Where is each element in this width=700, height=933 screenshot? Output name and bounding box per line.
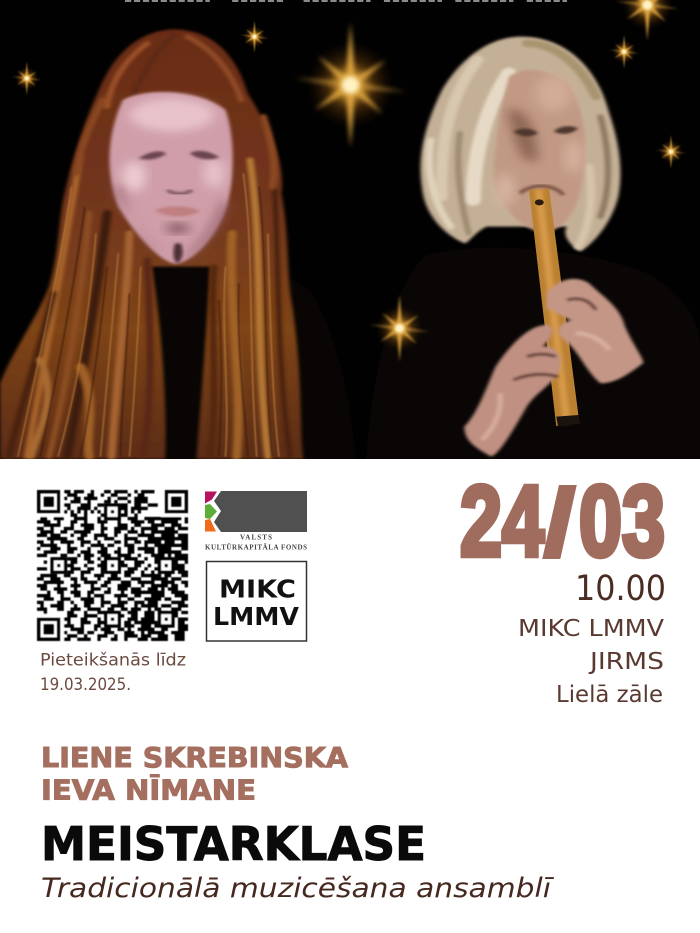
registration deadline	[40, 650, 186, 694]
photo: two musicians on black with gold stars	[0, 0, 700, 459]
QR code	[37, 490, 188, 641]
logo: Valsts Kultūrkapitāla fonds: VALSTS	[240, 534, 272, 542]
hands	[464, 279, 643, 457]
venue: MIKC LMMV	[518, 616, 664, 642]
performers: LIENE SKREBINSKA	[41, 742, 349, 774]
logo: MIKC LMMV	[206, 562, 306, 641]
musician: Ieva Nīmane with flute	[366, 37, 700, 459]
date: 24	[460, 466, 544, 578]
venue	[518, 616, 664, 708]
venue: Lielā zāle	[556, 682, 663, 708]
registration deadline: Pieteikšanās līdz	[40, 650, 186, 670]
date	[460, 466, 665, 578]
logo: MIKC LMMV: LMMV	[213, 602, 299, 631]
performers	[41, 742, 349, 806]
star in front of sweater	[369, 295, 430, 362]
flute	[529, 189, 579, 427]
logo: Valsts Kultūrkapitāla fonds	[205, 491, 307, 552]
logo: MIKC LMMV: MIKC	[219, 574, 296, 604]
date: /	[544, 470, 575, 575]
performers: IEVA NĪMANE	[41, 774, 256, 806]
registration deadline: 19.03.2025.	[40, 675, 131, 694]
stars behind the musicians	[12, 0, 686, 168]
subtitle: Tradicionālā muzicēšana ansamblī	[41, 873, 555, 904]
venue: JIRMS	[588, 649, 664, 675]
time: 10.00	[575, 569, 666, 609]
date: 03	[579, 466, 665, 578]
musician: Liene Skrebinska	[0, 29, 355, 459]
title: MEISTARKLASE	[41, 817, 426, 871]
logo: Valsts Kultūrkapitāla fonds: KULTŪRKAPITĀLA FONDS	[205, 544, 307, 552]
